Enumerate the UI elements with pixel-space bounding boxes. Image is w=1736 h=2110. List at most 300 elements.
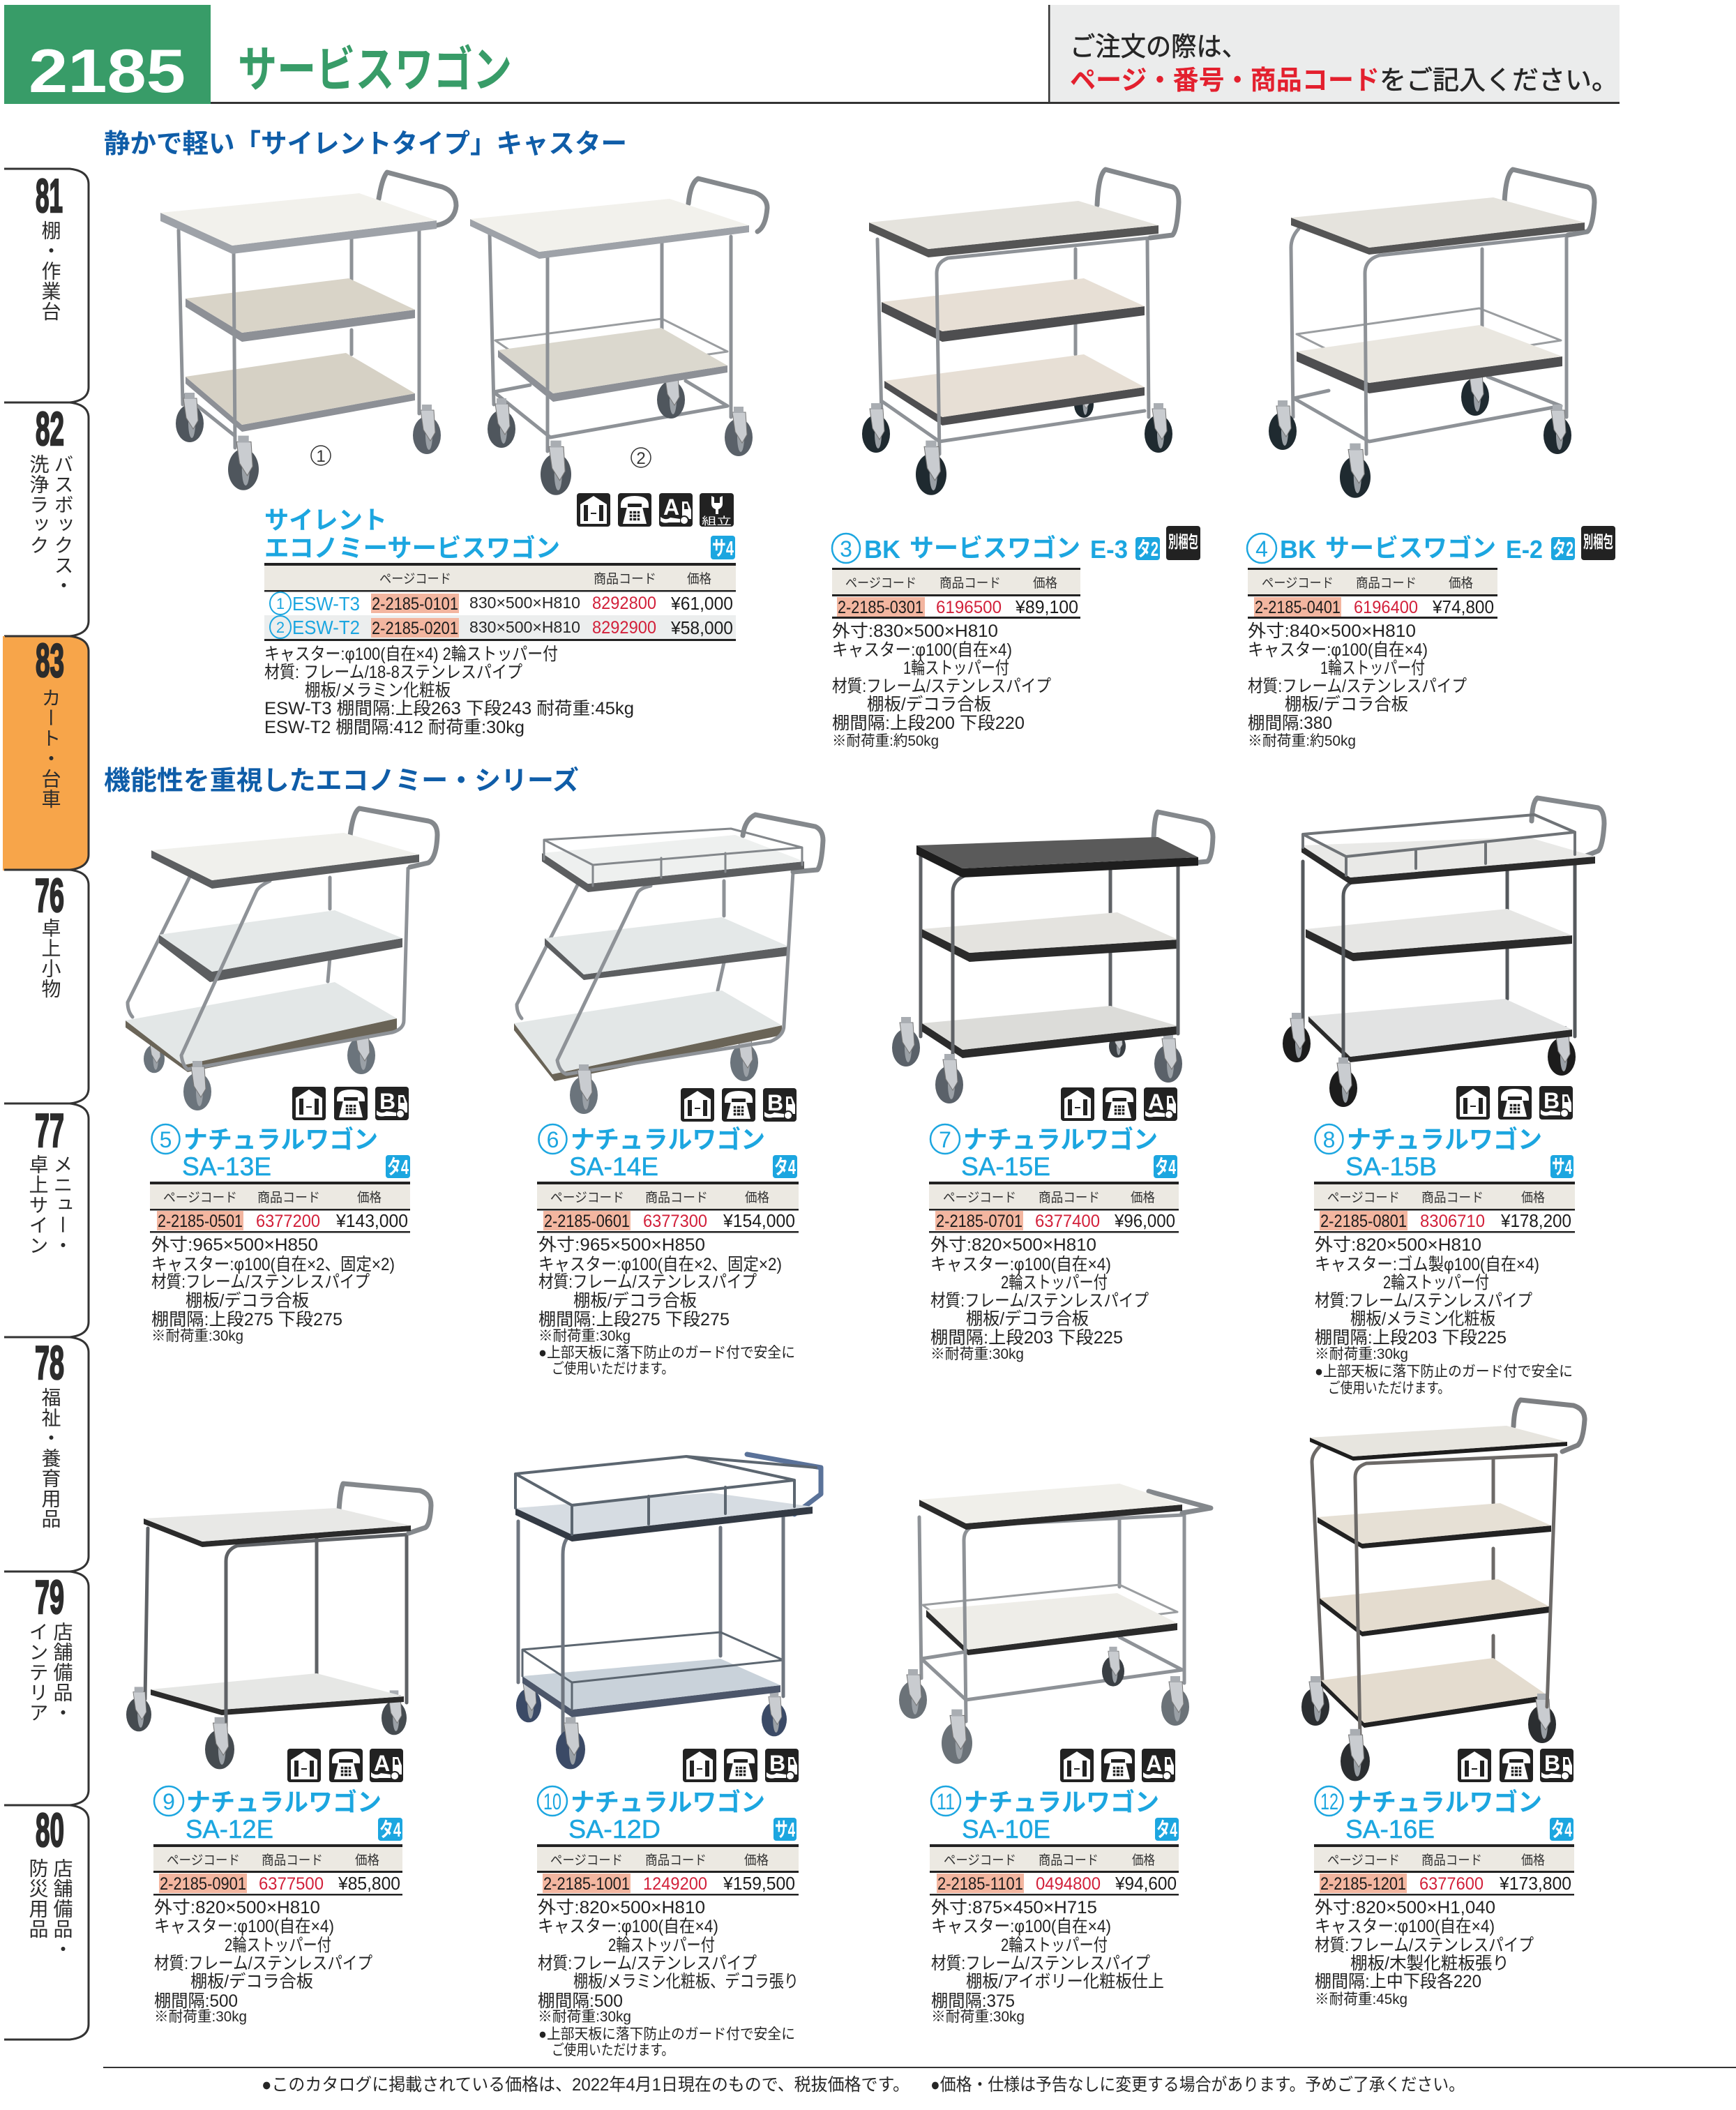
title: E-3 [1090, 535, 1128, 564]
specs: ESW-T3 棚間隔:上段263 下段243 耐荷重:45kg [264, 699, 634, 718]
product 1-2: silent economy wagon [264, 493, 736, 737]
label: cart 1 marker [311, 446, 331, 466]
specs: 材質:フレーム/ステンレスパイプ [931, 1954, 1150, 1973]
title: サービスワゴン [909, 534, 1080, 562]
specs: キャスター:φ100(自在×2、固定×2) [151, 1255, 395, 1274]
title: SA-10E [962, 1815, 1050, 1844]
delivery icons [1061, 1087, 1177, 1121]
specs: 材質:フレーム/ステンレスパイプ [538, 1954, 757, 1973]
specs: 材質:フレーム/ステンレスパイプ [1315, 1291, 1532, 1311]
price table: 6377200 [256, 1212, 320, 1231]
delivery icons: B [767, 1090, 783, 1115]
specs: 外寸:820×500×H810 [154, 1898, 320, 1917]
price table [832, 568, 1080, 619]
label: cart 2 marker [631, 448, 651, 468]
sidebar tab 78: 福祉・養育用品 [39, 1387, 61, 1529]
specs: 棚間隔:380 [1248, 714, 1332, 733]
price table: ESW-T3 [292, 593, 360, 615]
price table [264, 563, 736, 641]
title: ナチュラルワゴン [964, 1788, 1159, 1816]
specs: ESW-T2 棚間隔:412 耐荷重:30kg [264, 718, 524, 737]
footer note: specifications: ●価格・仕様は予告なしに変更する場合があります。予めご了承ください。 [930, 2075, 1465, 2095]
product 6: natural wagon SA-14E [537, 1088, 799, 1377]
sidebar tab 83 active [3, 634, 89, 871]
specs: ※耐荷重:45kg [1315, 1991, 1407, 2007]
specs: 外寸:840×500×H810 [1248, 621, 1416, 641]
price table: 2-2185-0601 [544, 1212, 630, 1231]
delivery badge: サ4 [775, 1819, 795, 1841]
specs: 棚板/デコラ合板 [573, 1291, 697, 1311]
price table: 2-2185-0701 [936, 1212, 1022, 1231]
title: BK [864, 535, 900, 564]
order notice panel: ご注文の際は、 [1070, 33, 1247, 62]
price table: 価格 [357, 1190, 382, 1205]
price table: ¥94,600 [1115, 1873, 1177, 1894]
sidebar tab 77: メニュー・ [52, 1154, 73, 1256]
product 9: natural wagon SA-12E [153, 1749, 403, 2025]
title: 5 [160, 1127, 172, 1152]
title: ナチュラルワゴン [183, 1125, 378, 1154]
specs: 材質:フレーム/ステンレスパイプ [151, 1272, 370, 1292]
price table [153, 1844, 402, 1896]
title: ナチュラルワゴン [963, 1125, 1158, 1154]
price table: ¥143,000 [335, 1210, 408, 1231]
delivery icons: B [379, 1089, 395, 1114]
photo: cart 6 [514, 815, 823, 1114]
price table: ESW-T2 [292, 617, 360, 638]
price table: 6377500 [259, 1874, 324, 1894]
price table: 0494800 [1036, 1874, 1101, 1894]
separate package badge [1166, 526, 1200, 560]
title: 4 [1255, 536, 1268, 562]
price table: ¥74,800 [1432, 596, 1494, 617]
delivery badge [1550, 1155, 1573, 1179]
delivery badge [1135, 537, 1160, 561]
price table: 商品コード [262, 1853, 323, 1868]
specs: 外寸:820×500×H1,040 [1315, 1898, 1495, 1917]
product 3: BK wagon E-3 [832, 526, 1200, 749]
specs [832, 621, 1051, 749]
sidebar tab 80 [4, 1804, 89, 2040]
price table: 2-2185-0301 [838, 598, 923, 617]
title: サイレント [264, 506, 387, 534]
specs: 材質:フレーム/ステンレスパイプ [538, 1272, 757, 1292]
price table: ¥173,800 [1499, 1873, 1571, 1894]
specs: 棚板/メラミン化粧板 [1350, 1309, 1495, 1329]
sidebar tab 79: インテリア [27, 1622, 49, 1723]
sidebar tab 77: 77 [35, 1104, 64, 1157]
specs [151, 1235, 395, 1344]
specs: ●上部天板に落下防止のガード付で安全に [538, 2026, 795, 2042]
title: 8 [1323, 1127, 1335, 1152]
specs: ※耐荷重:30kg [538, 2009, 631, 2025]
specs: ご使用いただけます。 [552, 2042, 674, 2058]
delivery badge: タ4 [1551, 1818, 1572, 1841]
specs: ●上部天板に落下防止のガード付で安全に [538, 1345, 795, 1361]
specs: ※耐荷重:30kg [154, 2009, 247, 2025]
label: cart 2 marker: 2 [636, 449, 646, 468]
title [154, 1786, 382, 1844]
specs: 2輪ストッパー付 [1001, 1273, 1108, 1293]
price table: 2-2185-0501 [158, 1212, 243, 1231]
price table: 価格 [744, 1853, 769, 1868]
specs: 棚間隔:500 [538, 1991, 623, 2011]
price table: 価格 [687, 571, 711, 587]
price table: 2-2185-1001 [543, 1874, 630, 1894]
title: 6 [547, 1127, 559, 1152]
price table: 830×500×H810 [469, 618, 580, 636]
price table: 商品コード [645, 1853, 707, 1868]
specs: ※耐荷重:30kg [538, 1328, 631, 1344]
sidebar tab 76: 76 [35, 869, 64, 922]
price table: ページコード [163, 1191, 237, 1205]
icon group: A [663, 495, 679, 520]
delivery badge: タ4 [1156, 1818, 1177, 1841]
specs: ご使用いただけます。 [1328, 1380, 1450, 1396]
photo: cart 2 [470, 179, 767, 495]
price table: 8306710 [1420, 1212, 1485, 1231]
price table: 商品コード [939, 575, 1001, 591]
title: 7 [939, 1127, 951, 1152]
price table: ページコード [550, 1191, 624, 1205]
specs: 棚板/デコラ合板 [867, 695, 991, 714]
delivery badge [1154, 1155, 1177, 1179]
specs: 棚板/メラミン化粧板、デコラ張り [573, 1972, 799, 1991]
delivery badge [378, 1818, 402, 1841]
price table: 価格 [1033, 575, 1057, 591]
delivery badge [1551, 537, 1575, 561]
title [264, 506, 560, 562]
separate package badge [1581, 526, 1615, 560]
title: ナチュラルワゴン [1348, 1788, 1542, 1816]
label: cart 1 marker: 1 [316, 447, 326, 466]
price table [1248, 568, 1497, 619]
specs: キャスター:φ100(自在×4) [931, 1917, 1111, 1936]
sidebar tab 80: 防災用品 [27, 1858, 49, 1939]
specs [264, 645, 634, 737]
specs [538, 1235, 795, 1377]
title: SA-12E [186, 1815, 273, 1844]
delivery icons [1060, 1749, 1175, 1782]
specs: 外寸:820×500×H810 [1315, 1235, 1481, 1255]
title: サービスワゴン [1325, 534, 1496, 562]
title: SA-15B [1345, 1152, 1437, 1181]
specs: 棚板/メラミン化粧板 [305, 681, 451, 700]
specs [154, 1898, 372, 2025]
specs: 材質:フレーム/ステンレスパイプ [832, 677, 1051, 696]
price table: 8292800 [592, 594, 656, 613]
delivery badge: タ2 [1553, 538, 1573, 561]
product 11: natural wagon SA-10E [930, 1749, 1179, 2025]
price table: 価格 [1521, 1190, 1545, 1205]
sidebar tab 83 active: カート・台車 [39, 688, 61, 809]
photo: cart 11 [899, 1484, 1211, 1764]
price table: ページコード [845, 576, 916, 591]
price table: ¥89,100 [1015, 596, 1078, 617]
price table: 1249200 [643, 1874, 707, 1894]
price table: ページコード [550, 1853, 623, 1868]
sidebar tab 77: 卓上サイン [27, 1154, 49, 1256]
sidebar tab 80: 店舗備品・ [52, 1858, 73, 1959]
title: サービスワゴン [238, 43, 512, 97]
price table: 価格 [1131, 1190, 1155, 1205]
delivery badge [386, 1155, 410, 1179]
sidebar tab 83 active: 83 [36, 634, 64, 687]
delivery icons: A [374, 1751, 390, 1776]
order notice panel: をご記入ください。 [1380, 66, 1618, 96]
price table: 2-2185-0901 [160, 1874, 246, 1894]
delivery badge [711, 536, 735, 560]
price table: 1 [276, 595, 285, 612]
specs: ※耐荷重:約50kg [832, 733, 939, 749]
specs: キャスター:φ100(自在×2、固定×2) [538, 1255, 782, 1274]
delivery badge: タ4 [387, 1156, 409, 1179]
title: BK [1280, 535, 1316, 564]
specs [538, 1898, 799, 2058]
delivery icons [292, 1087, 409, 1120]
price table: ¥61,000 [670, 593, 733, 614]
title [1247, 534, 1543, 564]
price table: 価格 [1521, 1853, 1545, 1868]
sidebar tab 82 [4, 402, 89, 636]
delivery icons [287, 1749, 403, 1782]
delivery badge [773, 1155, 797, 1179]
title: 3 [840, 536, 852, 562]
sidebar tab 76: 卓上小物 [39, 918, 61, 999]
specs: キャスター:φ100(自在×4) [832, 640, 1012, 660]
price table: ¥178,200 [1500, 1210, 1571, 1231]
delivery icons [681, 1088, 797, 1122]
delivery icons [683, 1749, 799, 1782]
order notice panel [1048, 5, 1620, 103]
product 12: natural wagon SA-16E [1314, 1749, 1574, 2007]
order notice panel: ページ・番号・商品コード [1070, 66, 1380, 96]
sidebar tab 82: バスボックス・ [52, 454, 74, 596]
photo: cart 5 [126, 808, 437, 1110]
title [832, 534, 1128, 564]
price table: ページコード [944, 1853, 1016, 1868]
title: 12 [1320, 1789, 1338, 1814]
specs: 外寸:875×450×H715 [931, 1898, 1097, 1917]
photo: cart 8 [1283, 798, 1604, 1107]
delivery badge: タ4 [774, 1156, 796, 1179]
price table [537, 1844, 799, 1896]
separate package badge: 別梱包 [1168, 533, 1198, 552]
specs [930, 1235, 1149, 1362]
specs: 棚板/デコラ合板 [1285, 695, 1408, 714]
photo: cart 10 [515, 1454, 821, 1769]
price table [930, 1844, 1179, 1896]
specs: 1輪ストッパー付 [903, 658, 1009, 678]
product 7: natural wagon SA-15E [929, 1087, 1179, 1362]
footer note: prices: ●このカタログに掲載されている価格は、2022年4月1日現在のもので、税抜価格です。 [262, 2075, 909, 2095]
price table [537, 1182, 799, 1233]
specs: キャスター:φ100(自在×4) [1315, 1917, 1495, 1936]
sidebar tab 81: 81 [36, 169, 63, 223]
specs: 棚間隔:500 [154, 1991, 238, 2011]
price table: 商品コード [1421, 1853, 1482, 1868]
delivery icons: A [1146, 1751, 1162, 1776]
price table [929, 1182, 1179, 1233]
title [538, 1786, 765, 1844]
price table: 2-2185-1101 [937, 1874, 1023, 1894]
title: ナチュラルワゴン [571, 1125, 765, 1154]
price table [150, 1182, 410, 1233]
title: ナチュラルワゴン [1347, 1125, 1542, 1154]
title: ナチュラルワゴン [571, 1788, 765, 1816]
specs [1248, 621, 1467, 749]
price table: 商品コード [1039, 1190, 1100, 1205]
page number block [4, 5, 211, 105]
specs: ※耐荷重:約50kg [1248, 733, 1356, 749]
delivery icons [1456, 1086, 1573, 1120]
delivery icons [1458, 1749, 1573, 1782]
price table: ¥85,800 [338, 1873, 400, 1894]
section heading: economy series: 機能性を重視したエコノミー・シリーズ [104, 766, 579, 796]
sidebar tab 81: 棚・作業台 [39, 220, 61, 322]
delivery icons: A [1148, 1090, 1164, 1115]
specs: 2輪ストッパー付 [608, 1936, 715, 1955]
title [538, 1124, 765, 1181]
price table: 2-2185-0101 [372, 594, 458, 614]
delivery icons: B [769, 1751, 785, 1776]
price table: 6196400 [1354, 598, 1418, 617]
title [1315, 1124, 1542, 1181]
title: SA-13E [182, 1152, 271, 1181]
price table: 8292900 [592, 618, 656, 638]
price table: ページコード [167, 1853, 240, 1868]
specs: キャスター:φ100(自在×4) [154, 1917, 334, 1936]
delivery icons: B [1544, 1751, 1560, 1776]
price table: 2-2185-0201 [372, 619, 458, 638]
sidebar tab 82: 82 [36, 402, 64, 455]
product 4: BK wagon E-2 [1247, 526, 1615, 749]
specs: 2輪ストッパー付 [1001, 1936, 1108, 1955]
price table: 価格 [1449, 575, 1473, 591]
delivery badge [1550, 1818, 1573, 1841]
price table: ¥58,000 [670, 617, 733, 638]
sidebar tab 76 [4, 869, 89, 1103]
delivery badge: タ4 [1155, 1156, 1176, 1179]
sidebar tab 77 [4, 1103, 89, 1337]
delivery badge: タ2 [1137, 538, 1158, 561]
title: SA-15E [961, 1152, 1050, 1181]
specs: ※耐荷重:30kg [930, 1346, 1024, 1362]
specs: 外寸:965×500×H850 [538, 1235, 705, 1255]
specs: 棚間隔:上段203 下段225 [1315, 1328, 1507, 1348]
price table: 2-2185-0401 [1255, 598, 1341, 617]
sidebar tab 79: 79 [35, 1571, 64, 1624]
sidebar tab 79: 店舗備品・ [52, 1622, 73, 1723]
specs: 材質:フレーム/ステンレスパイプ [1315, 1936, 1534, 1955]
product 10: natural wagon SA-12D [537, 1749, 799, 2058]
specs: 外寸:820×500×H810 [538, 1898, 705, 1917]
specs: 外寸:965×500×H850 [151, 1235, 318, 1255]
title: ナチュラルワゴン [186, 1788, 382, 1816]
price table: 商品コード [1039, 1853, 1099, 1868]
specs: キャスター:φ100(自在×4) [1248, 640, 1428, 660]
specs: 棚間隔:上段200 下段220 [832, 714, 1025, 733]
sidebar tab 80: 80 [36, 1804, 64, 1857]
price table: ページコード [943, 1191, 1016, 1205]
specs: キャスター:φ100(自在×4) [538, 1917, 718, 1936]
sidebar tab 78 [4, 1336, 89, 1572]
price table [1314, 1844, 1574, 1896]
specs: 2輪ストッパー付 [225, 1936, 331, 1955]
photo: cart 9 [126, 1484, 431, 1769]
specs [1315, 1235, 1573, 1396]
specs: 棚間隔:375 [931, 1991, 1015, 2011]
price table: ¥154,000 [723, 1210, 795, 1231]
specs: ※耐荷重:30kg [1315, 1346, 1408, 1362]
title: 10 [543, 1789, 561, 1814]
sidebar tab 79 [4, 1571, 89, 1805]
price table: 価格 [1132, 1853, 1155, 1868]
price table: 2-2185-1201 [1320, 1874, 1406, 1894]
delivery badge [773, 1818, 797, 1841]
specs: 材質:フレーム/ステンレスパイプ [154, 1954, 372, 1973]
price table: ¥96,000 [1114, 1210, 1175, 1231]
price table [1314, 1182, 1575, 1233]
price table: 830×500×H810 [469, 594, 580, 612]
specs: 棚間隔:上段275 下段275 [538, 1310, 730, 1329]
separate package badge: 別梱包 [1583, 533, 1613, 552]
title: SA-16E [1345, 1815, 1435, 1844]
specs: 材質:フレーム/ステンレスパイプ [930, 1291, 1149, 1311]
title: エコノミーサービスワゴン [264, 534, 560, 562]
specs: 1輪ストッパー付 [1320, 658, 1425, 678]
specs: キャスター:φ100(自在×4) [930, 1255, 1111, 1274]
specs: 外寸:830×500×H810 [832, 621, 998, 641]
specs: 材質: フレーム/18-8ステンレスパイプ [264, 663, 522, 682]
product 8: natural wagon SA-15B [1314, 1086, 1575, 1396]
specs: 棚間隔:上段203 下段225 [930, 1328, 1123, 1348]
title: 11 [937, 1789, 955, 1814]
photo: cart 3 [862, 169, 1179, 495]
specs: 棚板/木製化粧板張り [1350, 1954, 1509, 1973]
product 5: natural wagon SA-13E [150, 1087, 410, 1344]
specs: 棚板/デコラ合板 [966, 1309, 1089, 1329]
title: 9 [163, 1789, 175, 1814]
price table: ページコード [379, 572, 451, 587]
price table: 商品コード [1421, 1190, 1484, 1205]
icon group: 組立 [702, 515, 732, 527]
specs: 棚間隔:上段275 下段275 [151, 1310, 342, 1329]
sidebar tab 82: 洗浄ラック [28, 454, 49, 555]
icon group [577, 493, 734, 527]
delivery icons: B [1543, 1088, 1560, 1113]
price table: 商品コード [257, 1190, 320, 1205]
delivery badge: タ4 [379, 1818, 401, 1841]
price table: ページコード [1327, 1853, 1400, 1868]
photo: cart 1 [160, 172, 456, 490]
photo: cart 7 [892, 812, 1213, 1103]
specs: キャスター:ゴム製φ100(自在×4) [1315, 1255, 1539, 1274]
specs: キャスター:φ100(自在×4) 2輪ストッパー付 [264, 645, 558, 664]
photo: cart 12 [1301, 1400, 1585, 1781]
price table: 2-2185-0801 [1320, 1212, 1407, 1231]
price table: 価格 [745, 1190, 769, 1205]
price table: 商品コード [594, 571, 656, 587]
delivery badge: サ4 [712, 538, 734, 560]
title: E-2 [1506, 535, 1543, 564]
price table: 2 [276, 619, 285, 636]
specs: 2輪ストッパー付 [1383, 1273, 1489, 1293]
specs [1315, 1898, 1534, 2007]
price table: ページコード [1327, 1191, 1400, 1205]
specs: 棚間隔:上中下段各220 [1315, 1972, 1481, 1991]
specs: 材質:フレーム/ステンレスパイプ [1248, 677, 1467, 696]
